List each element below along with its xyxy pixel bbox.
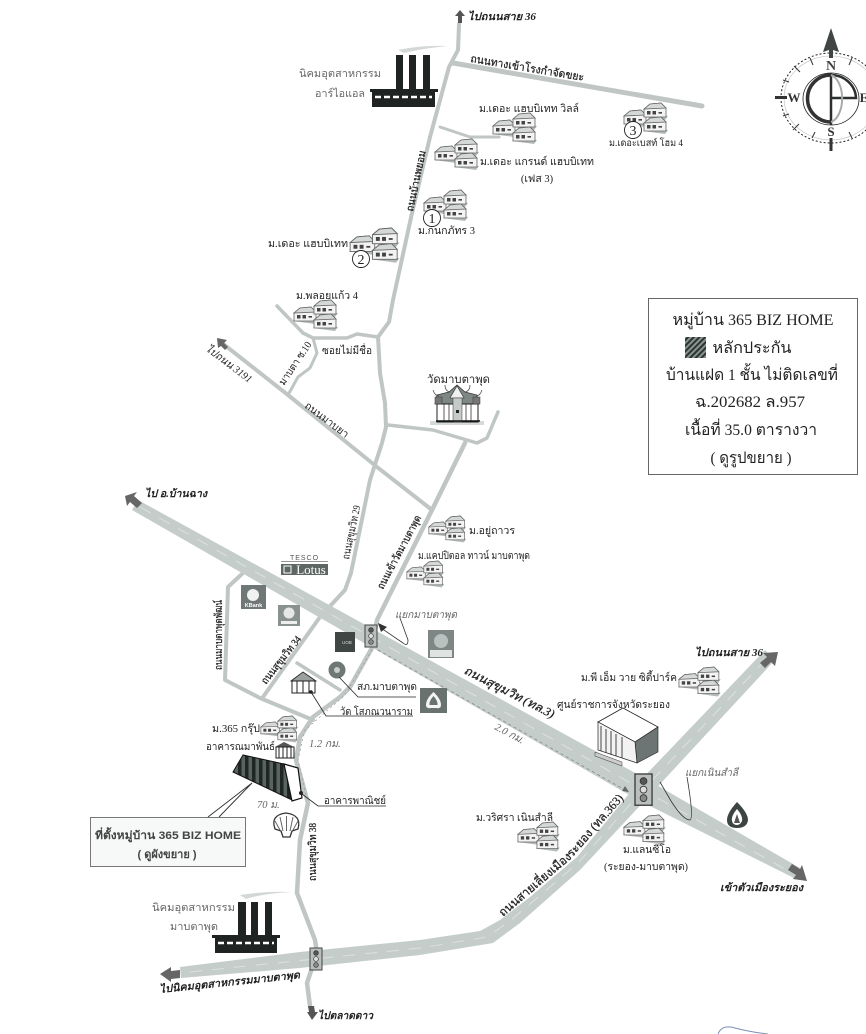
road and place labels: ถนนสุขุมวิท (ทล.3) (461, 663, 557, 722)
distance marker: 2.0 km dashed line (378, 650, 625, 790)
road and place labels: เข้าตัวเมืองระยอง (720, 881, 804, 894)
road and place labels: ม.เดอะ แฮบบิเทท (268, 238, 348, 250)
factory: Map Ta Phut industrial estate (212, 892, 293, 953)
road and place labels: ไปนิคมอุตสาหกรรมมาบตาพุด (159, 968, 302, 996)
logo: KBank (241, 585, 266, 609)
compass: S (827, 124, 835, 139)
label: Map Ta Phut industrial estate (152, 902, 235, 933)
road and place labels: (เฟส 3) (521, 174, 554, 185)
callout: project location: ที่ตั้งหมู่บ้าน 365 BIZ HOME (95, 827, 241, 843)
number marker 3 (624, 122, 642, 139)
logo: SCB (420, 688, 447, 713)
road and place labels: แยกมาบตาพุด (395, 610, 458, 621)
icon: Shell logo (274, 813, 299, 837)
road and place labels: ถนนทางเข้าโรงกำจัดขยะ (470, 51, 585, 84)
traffic signal: Noen Samlee (635, 774, 652, 805)
building: Rayong Government Center (595, 708, 658, 766)
number marker 2 (352, 250, 370, 268)
leader: police station (339, 677, 416, 697)
road and place labels: ระยอง (ทล.363) (564, 791, 626, 860)
compass: W (788, 90, 800, 105)
legend panel: บ้านแฝด 1 ชั้น ไม่ติดเลขที่ (666, 363, 838, 384)
road: Sukhumvit main highway (132, 500, 800, 878)
road and place labels: ม.เดอะ แฮบบิเทท วิลล์ (479, 102, 579, 115)
road and place labels: ม.อยู่ถาวร (469, 526, 515, 537)
road and place labels: ถนนสุขุมวิท 34 (259, 633, 304, 687)
road and place labels: ม.แคปปิตอล ทาวน์ มาบตาพุด (418, 549, 530, 562)
traffic signal: Map Ta Phut (365, 625, 377, 647)
legend panel: ฉ.202682 ล.957 (695, 394, 805, 411)
arrow: to road 3191 (217, 338, 228, 350)
arrow: to Ban Chang (125, 492, 142, 508)
road and place labels: ถนนสุขุมวิท 29 (340, 504, 363, 561)
road and place labels: ม.วริศรา เนินสำลี (476, 811, 553, 824)
distance marker: 1.2 km dashed line (298, 650, 372, 795)
label: Map Ta Phut industrial estate: มาบตาพุด (170, 922, 218, 933)
road and place labels: ไปถนนสาย 36 (468, 10, 537, 23)
road and place labels: ม.พี เอ็ม วาย ซิตี้ปาร์ค (581, 670, 677, 684)
arrow: into Rayong town (788, 864, 807, 881)
number marker 2: 2 (358, 253, 364, 268)
road and place labels: สภ.มาบตาพุด (357, 682, 417, 693)
road and place labels: อาคารณมาพันธ์ (206, 740, 275, 753)
icon: police station (328, 662, 346, 678)
legend panel (648, 298, 858, 474)
road and place labels: แยกเนินสำลี (685, 767, 740, 779)
project parcel (233, 755, 302, 801)
callout: project location (90, 818, 246, 866)
road and place labels: ถนนสายเลี่ยงเมือง (495, 848, 574, 919)
arrowhead: 2.0 km east end (622, 786, 629, 792)
road and place labels: ถนนมาบยา (302, 401, 350, 441)
logo: KBank: KBank (245, 603, 263, 609)
road and place labels: ม.365 กรุ๊ป (212, 722, 260, 735)
icon: PTT flame logo (727, 802, 748, 828)
road and place labels: ถนนบ้านพยอม (404, 149, 429, 213)
leader: Map Ta Phut junction (381, 618, 408, 644)
traffic signal: south junction (310, 948, 322, 970)
road network: minor roads (222, 24, 702, 1006)
road and place labels (145, 10, 804, 1022)
road and place labels: ไป อ.บ้านฉาง (145, 487, 208, 500)
lane dashes (140, 507, 792, 972)
label: RIL industrial estate: อาร์ไอแอล (315, 87, 365, 100)
building: Chana Phan (275, 742, 294, 758)
number marker 1 (424, 210, 440, 227)
legend panel: ( ดูรูปขยาย ) (710, 450, 792, 468)
road: bypass 363 (180, 650, 775, 978)
road and place labels: 2.0 กม. (493, 722, 526, 747)
arrow: to Map Ta Phut estate (160, 967, 180, 982)
factory: RIL industrial estate (370, 46, 448, 107)
legend panel: เนื้อที่ 35.0 ตารางวา (685, 418, 817, 439)
leader: Wat Sopon (311, 692, 413, 716)
scribble at page bottom (718, 1027, 768, 1034)
label: RIL industrial estate: นิคมอุตสาหกรรม (299, 68, 381, 80)
road and place labels: วัด โสภณวนาราม (340, 705, 413, 718)
road and place labels: อาคารพาณิชย์ (324, 794, 386, 807)
road and place labels: ม.เดอะเบสท์ โฮม 4 (609, 137, 683, 149)
road and place labels: ม.เดอะ แกรนด์ แฮบบิเทท (480, 155, 594, 168)
road and place labels: ถนนสุขุมวิท 38 (307, 823, 319, 881)
logo: Government Savings Bank (428, 630, 454, 658)
housing icons (260, 103, 721, 851)
road and place labels: ถนนมาบตาพุดพัฒน์ (212, 600, 225, 670)
road and place labels: ไปถนนสาย 36 (695, 646, 764, 659)
logo: UOB (335, 632, 355, 652)
road and place labels: ไปตลาดดาว (318, 1009, 374, 1022)
dot: Wat Sopon (309, 690, 313, 694)
road and place labels: (ระยอง-มาบตาพุด) (604, 862, 688, 873)
leader: commercial building (302, 794, 386, 806)
arrow: to Talat Dao (307, 1006, 318, 1020)
arrowhead: Map Ta Phut junction (378, 623, 387, 632)
road and place labels: มาบตา ซ.10 (277, 340, 314, 388)
legend panel: หลักประกัน (712, 340, 792, 357)
leader: Noen Samlee junction (660, 777, 691, 820)
arrow: north to route 36 (455, 10, 465, 23)
logo: UOB: UOB (342, 640, 352, 645)
road and place labels: ไปถนน 3191 (203, 342, 255, 385)
road and place labels: ซอยไม่มีชื่อ (322, 343, 372, 357)
road and place labels: 70 ม. (257, 800, 280, 811)
road and place labels: ถนนเข้าวัดมาบตาพุด (375, 513, 424, 591)
dot: commercial building (299, 791, 303, 795)
label: RIL industrial estate (299, 68, 381, 100)
road and place labels: ม.กนกภัทร 3 (418, 225, 475, 237)
label: Map Ta Phut industrial estate: นิคมอุตสาหกรรม (152, 902, 235, 914)
logo: Krungthai bank (278, 605, 300, 626)
temple: Wat Sopon Wanaram small (291, 672, 316, 693)
road and place labels: ม.แลนซีโอ (623, 843, 671, 856)
road and place labels: ศูนย์ราชการจังหวัดระยอง (557, 698, 670, 711)
number marker 1: 1 (428, 212, 436, 227)
logo: Tesco Lotus: TESCO (290, 555, 319, 562)
compass (775, 28, 866, 151)
arrow: to route 36 east (760, 652, 778, 668)
logo: Tesco Lotus: Lotus (296, 562, 326, 577)
temple: Wat Map Ta Phut (430, 385, 484, 425)
legend panel: หมู่บ้าน 365 BIZ HOME (672, 311, 834, 330)
leader: parcel callout (208, 783, 252, 817)
road and place labels: วัดมาบตาพุด (427, 374, 490, 386)
logo: Tesco Lotus (281, 553, 328, 577)
callout: project location: ( ดูผังขยาย ) (138, 848, 197, 862)
number marker 3: 3 (630, 124, 636, 139)
road and place labels: 1.2 กม. (309, 739, 341, 750)
road and place labels: ม.พลอยแก้ว 4 (296, 290, 359, 302)
compass: N (826, 59, 836, 74)
